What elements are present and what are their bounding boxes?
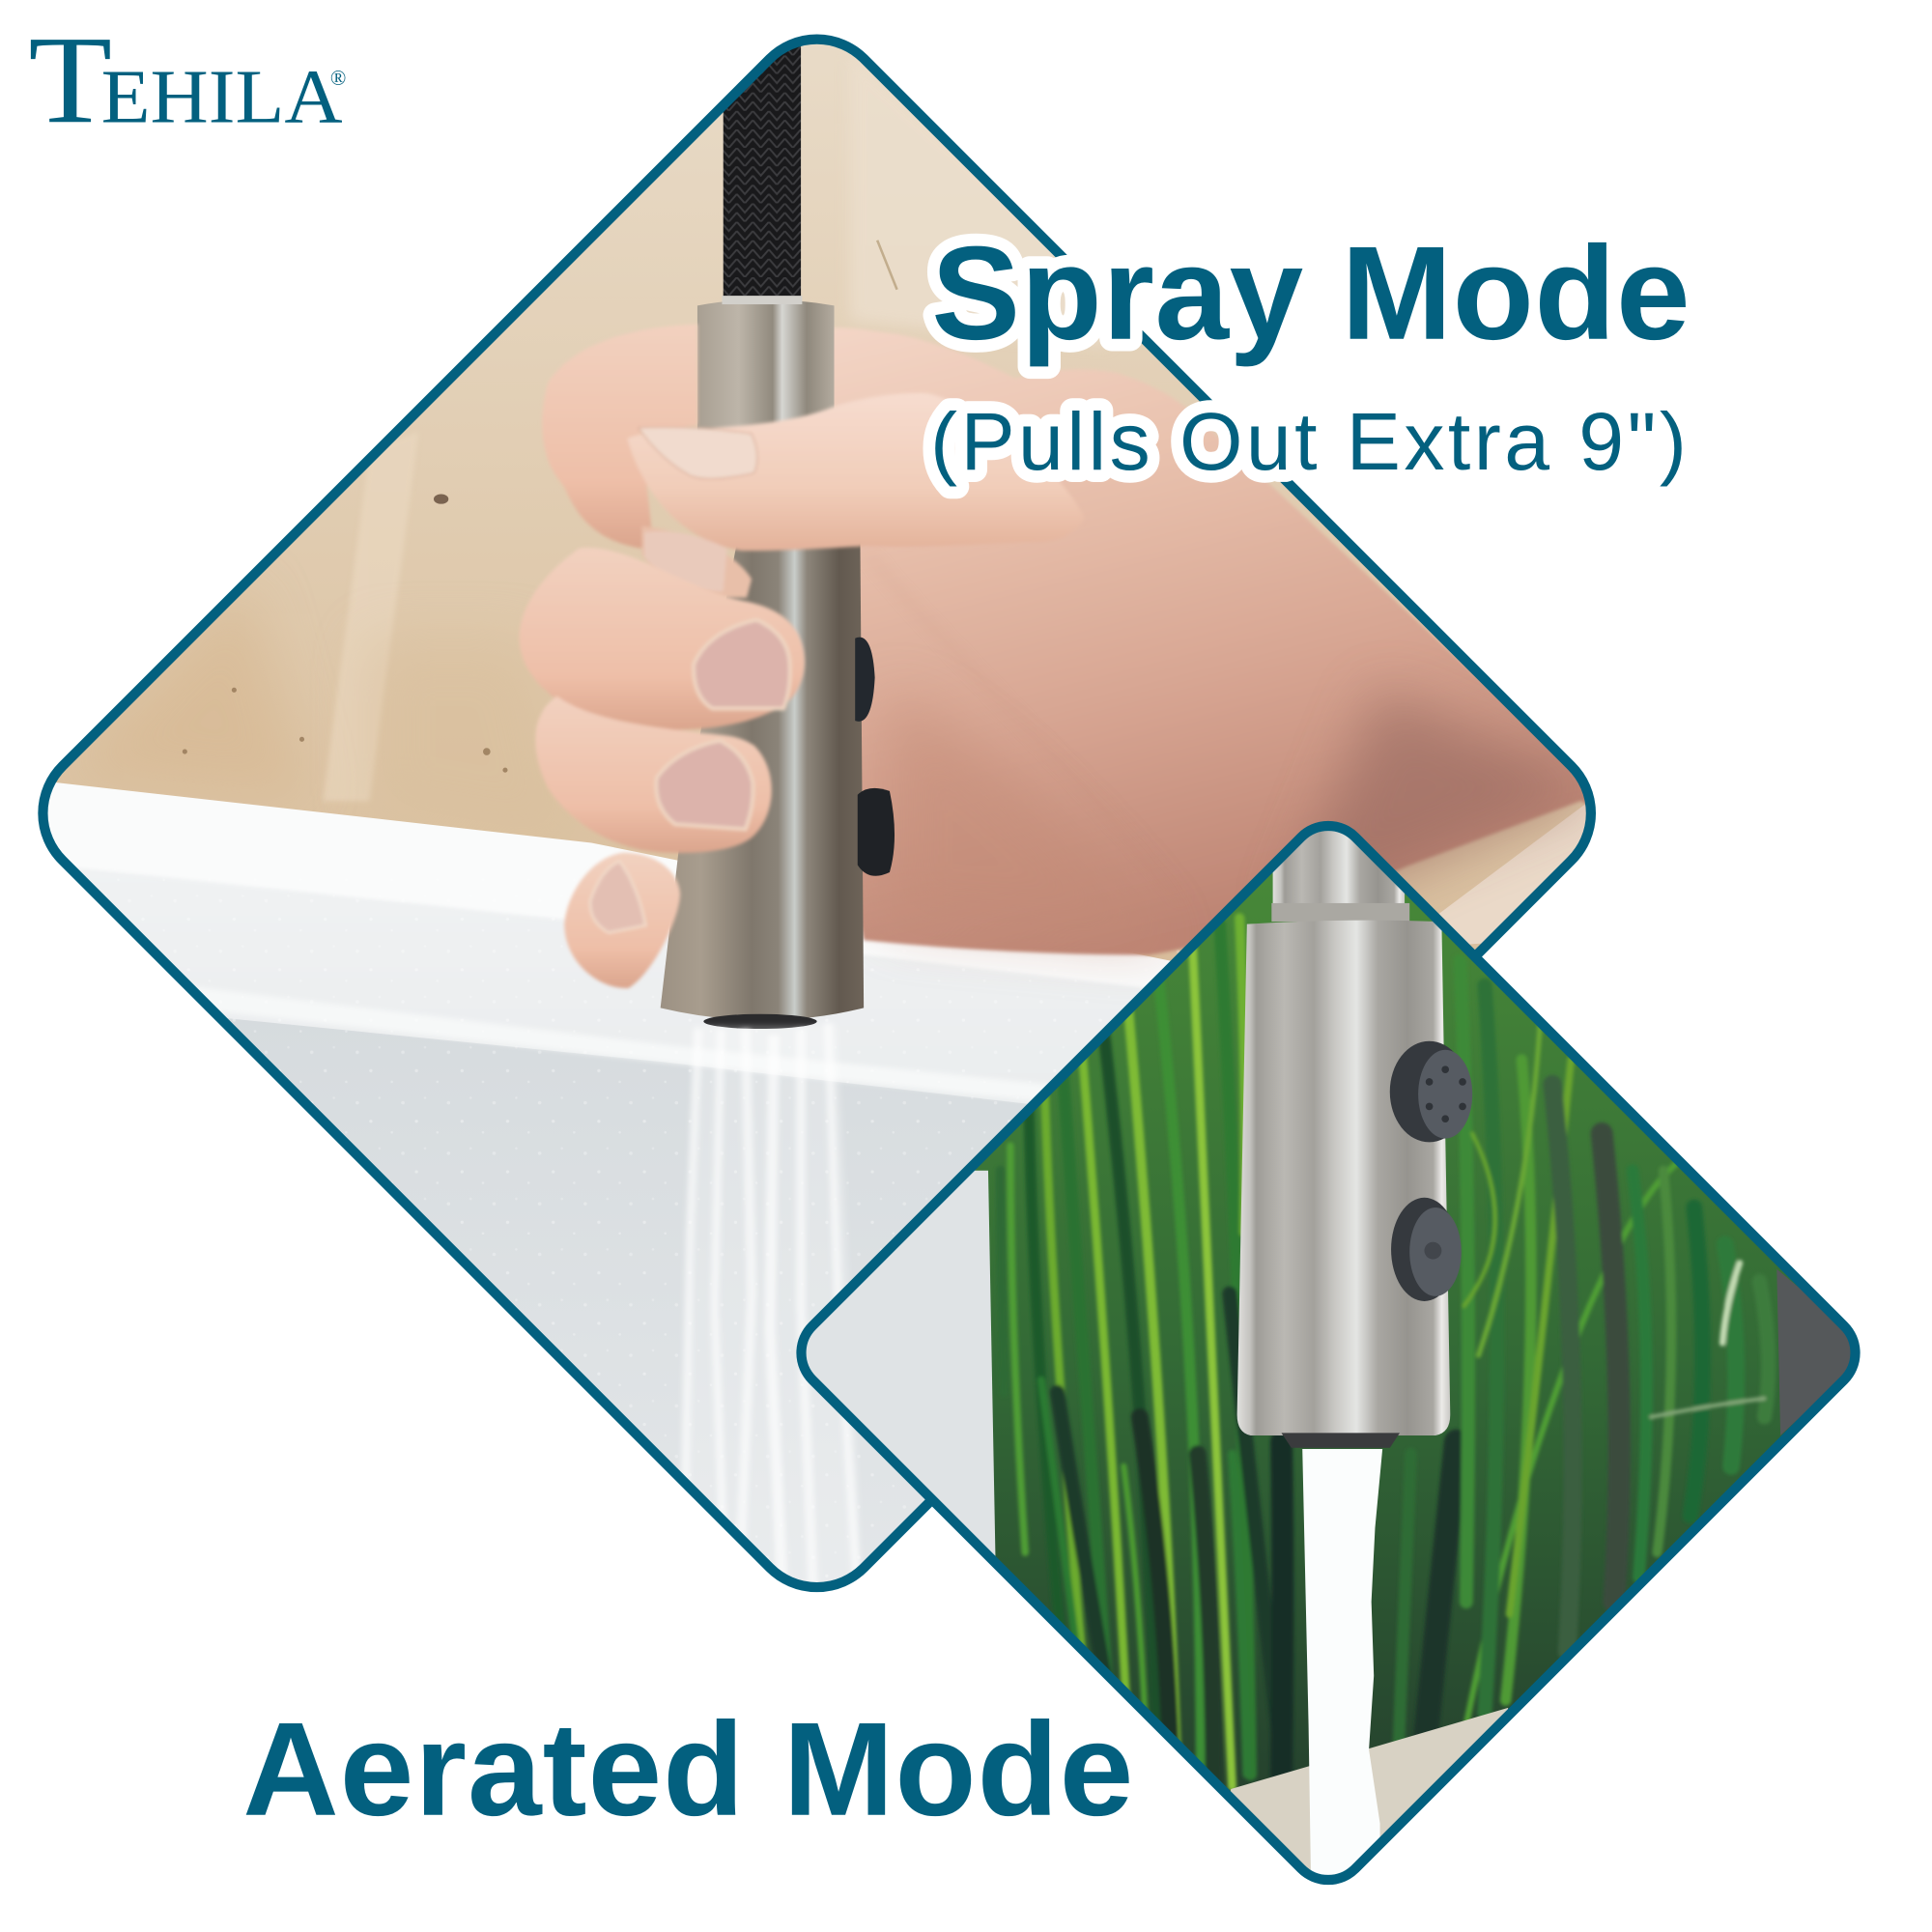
heading: aerated mode: Aerated Mode bbox=[242, 1695, 1134, 1844]
hose bbox=[724, 37, 801, 298]
white sink bbox=[48, 782, 1179, 1582]
water spray bbox=[678, 1023, 863, 1589]
wood countertop bbox=[56, 44, 1586, 961]
spray button bbox=[1390, 1041, 1472, 1142]
faucet neck bbox=[1273, 826, 1405, 906]
grass background bbox=[975, 872, 1801, 1791]
thumb and hand web bbox=[542, 324, 1084, 598]
aerator button bbox=[1391, 1198, 1462, 1301]
aerator bbox=[1282, 1433, 1400, 1448]
logo: Tehila wordmark bbox=[28, 11, 346, 150]
stone planter bbox=[1231, 1708, 1509, 1870]
aerated water stream bbox=[1302, 1449, 1382, 1886]
back of hand bbox=[835, 327, 1586, 975]
panel: aerated mode photo diamond bbox=[785, 810, 1873, 1897]
subheading: pulls out extra: (Pulls Out Extra 9") bbox=[930, 396, 1690, 487]
logo: Tehila wordmark: T bbox=[28, 11, 112, 150]
panel: spray mode photo diamond bbox=[38, 35, 1596, 1592]
faucet spray head bbox=[661, 296, 895, 1029]
white sink at left bbox=[806, 1171, 995, 1556]
logo: Tehila wordmark: ® bbox=[330, 67, 346, 90]
faucet collar bbox=[1271, 903, 1409, 922]
fingers bbox=[520, 548, 805, 988]
gray object at right corner bbox=[1776, 1269, 1851, 1435]
diamond border bbox=[785, 810, 1871, 1895]
faucet body bbox=[1237, 921, 1450, 1435]
logo: Tehila wordmark: EHILA bbox=[101, 55, 343, 139]
diamond border bbox=[15, 12, 1618, 1615]
grass blades bbox=[1001, 918, 1769, 1786]
heading: spray mode: Spray Mode bbox=[931, 219, 1690, 368]
